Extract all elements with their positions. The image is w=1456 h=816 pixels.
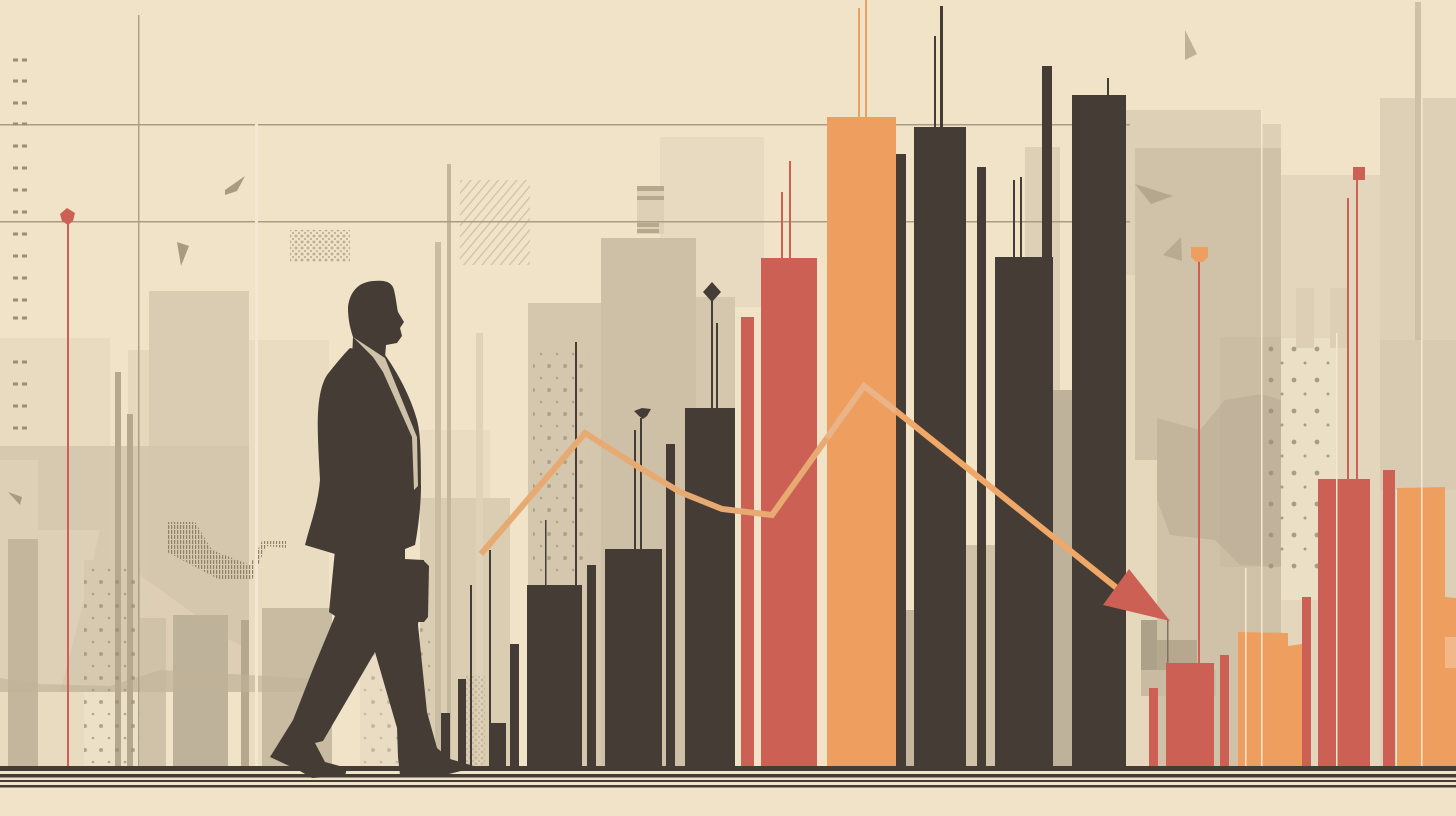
cream vertical highlight lines bbox=[1245, 98, 1422, 768]
bar chart: dark bars bbox=[441, 6, 1168, 768]
floor stripes bbox=[0, 766, 1456, 788]
bar chart: red bars bbox=[741, 161, 1395, 768]
trend line with down arrow bbox=[481, 386, 1170, 621]
businessman silhouette bbox=[270, 281, 477, 778]
bar chart: orange bars bbox=[827, 0, 1456, 768]
briefcase bbox=[405, 559, 429, 622]
jacket bbox=[305, 348, 421, 554]
grid lines and left tick marks bbox=[0, 15, 1130, 768]
trousers and shoes bbox=[270, 546, 477, 778]
shirt collar and tie bbox=[353, 337, 418, 490]
red marker pin left bbox=[60, 208, 75, 766]
head bbox=[348, 281, 404, 358]
